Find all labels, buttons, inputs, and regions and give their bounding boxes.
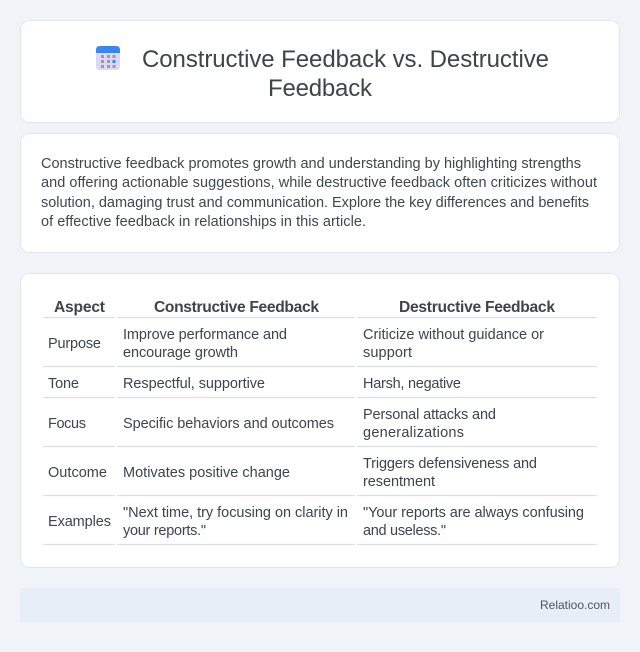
row: examples bbox=[48, 505, 584, 539]
row: purpose: Purpose bbox=[48, 336, 101, 352]
row: outcome: Outcome bbox=[48, 465, 107, 481]
panel: header bbox=[20, 20, 620, 122]
row: examples: your reports." bbox=[123, 523, 206, 539]
row: tone bbox=[48, 376, 461, 392]
text block: introduction: Constructive feedback promotes growth and understanding by highlighting strengths bbox=[41, 156, 581, 172]
table header: Aspect bbox=[54, 299, 105, 316]
row: tone: Tone bbox=[48, 376, 79, 392]
row: purpose: encourage growth bbox=[123, 345, 238, 361]
row: outcome: Triggers defensiveness and bbox=[363, 456, 537, 472]
table header bbox=[54, 299, 555, 316]
row: examples: Examples bbox=[48, 514, 111, 530]
title: Constructive Feedback vs. Destructive bbox=[142, 46, 549, 73]
panel: comparison table bbox=[20, 274, 620, 568]
title bbox=[142, 46, 549, 102]
row: focus: Focus bbox=[48, 416, 86, 432]
text block: introduction: of effective feedback in relationships in this article. bbox=[41, 214, 366, 230]
row: purpose: Improve performance and bbox=[123, 327, 287, 343]
row: focus: generalizations bbox=[363, 425, 464, 441]
row: purpose bbox=[48, 327, 544, 361]
table header: Destructive Feedback bbox=[399, 299, 555, 316]
row: tone: Harsh, negative bbox=[363, 376, 461, 392]
panel: introduction bbox=[20, 134, 620, 252]
row: tone: Respectful, supportive bbox=[123, 376, 265, 392]
text block: introduction: solution, damaging trust and communication. Explore the key differences and benefits bbox=[41, 195, 589, 211]
row: purpose: support bbox=[363, 345, 412, 361]
text block: introduction bbox=[41, 156, 597, 230]
row: outcome: Motivates positive change bbox=[123, 465, 290, 481]
row: purpose: Criticize without guidance or bbox=[363, 327, 544, 343]
title: Feedback bbox=[268, 75, 373, 102]
row: focus: Personal attacks and bbox=[363, 407, 496, 423]
text block: introduction: and offering actionable suggestions, while destructive feedback often criticizes without bbox=[41, 175, 597, 191]
row: examples: "Next time, try focusing on clarity in bbox=[123, 505, 348, 521]
row: examples: "Your reports are always confusing bbox=[363, 505, 584, 521]
table header: Constructive Feedback bbox=[154, 299, 319, 316]
row: examples: and useless." bbox=[363, 523, 446, 539]
row: outcome bbox=[48, 456, 537, 490]
row: focus: Specific behaviors and outcomes bbox=[123, 416, 334, 432]
footer bbox=[20, 588, 620, 622]
footer credit: Relatioo.com bbox=[540, 598, 610, 612]
row: focus bbox=[48, 407, 496, 441]
row: outcome: resentment bbox=[363, 474, 435, 490]
icon: calendar bbox=[96, 46, 120, 70]
